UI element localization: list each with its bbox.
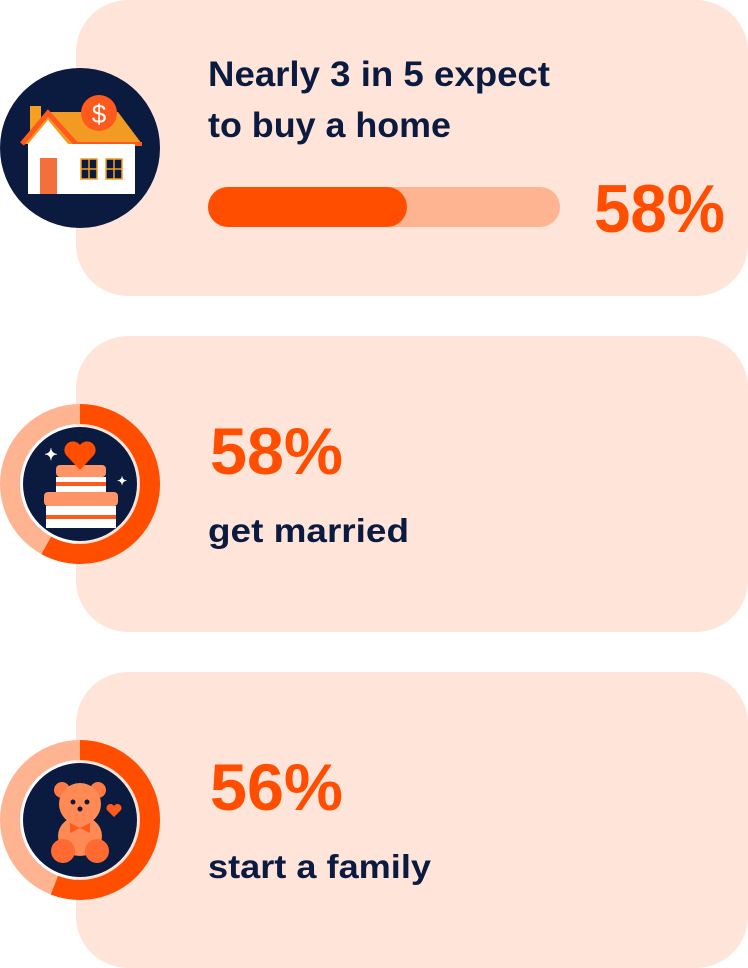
icon: house with dollar: $: [92, 99, 107, 129]
heading: nearly 3 in 5: to buy a home: [208, 106, 451, 145]
label: start a family: start a family: [208, 848, 432, 885]
bar chart: 58%: [208, 187, 560, 227]
icon: house with dollar: [0, 68, 160, 228]
panel: buy a home: [76, 0, 748, 296]
icon: donut ring with teddy bear: [10, 750, 150, 890]
stat: 56%: 56%: [210, 750, 343, 824]
icon: donut ring with cake: ✦: [44, 447, 58, 464]
icon: donut ring with cake: [10, 414, 150, 554]
stat: 58%: 58%: [210, 414, 343, 488]
label: get married: get married: [208, 512, 409, 549]
stat: 58%: 58%: [594, 171, 725, 247]
panel: start a family: [76, 672, 748, 968]
heading: nearly 3 in 5: Nearly 3 in 5 expect: [208, 55, 550, 94]
panel: get married: [76, 336, 748, 632]
icon: donut ring with cake: ✦: [117, 474, 127, 488]
heading: nearly 3 in 5: [208, 55, 550, 145]
